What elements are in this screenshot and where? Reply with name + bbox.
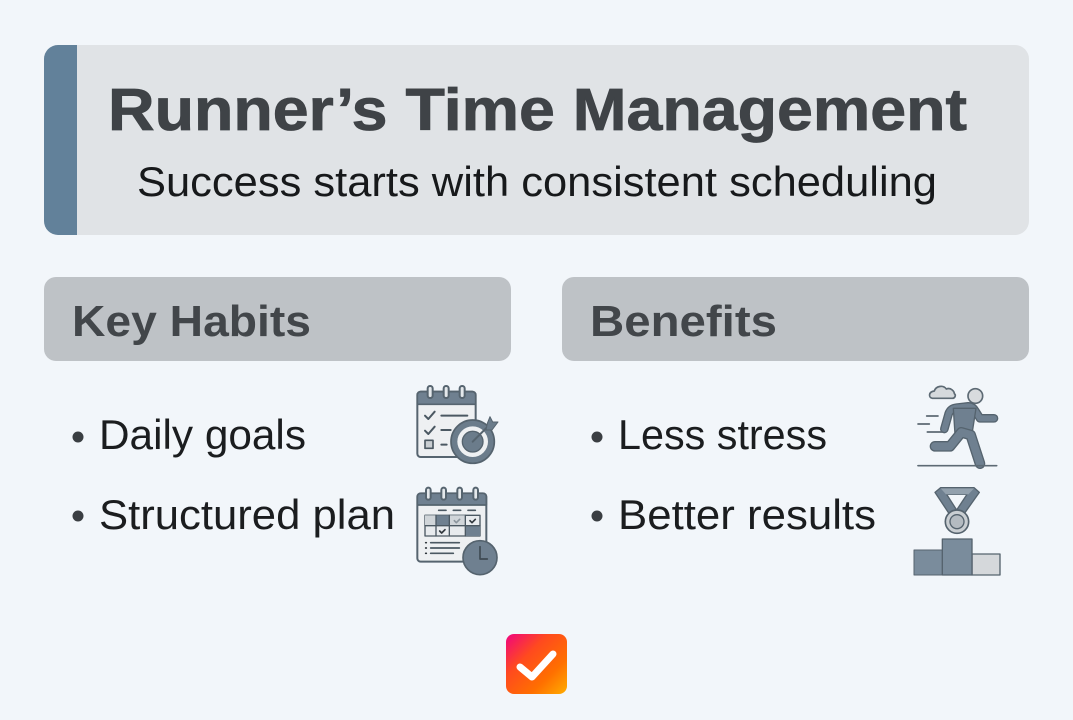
list item: daily goals: Daily goals (99, 411, 306, 458)
icon: medal on podium (914, 488, 1000, 575)
panel: title banner (44, 45, 1029, 235)
subtitle: Success starts with consistent scheduling (137, 158, 937, 205)
list item: structured plan: Structured plan (99, 491, 395, 538)
panel: benefits heading: Benefits (590, 297, 777, 346)
list item: better results: Better results (618, 491, 876, 538)
list item: less stress: Less stress (618, 411, 827, 458)
panel: key habits heading: Key Habits (72, 297, 311, 346)
icon: gradient check badge (506, 634, 567, 694)
panel: benefits heading (562, 277, 1029, 361)
icon: checklist calendar with target (417, 386, 498, 463)
icon: running figure (918, 386, 997, 466)
accent bar (44, 45, 77, 235)
panel: key habits heading (44, 277, 511, 361)
icon: schedule calendar with clock (417, 488, 497, 575)
title: Runner’s Time Management (108, 77, 967, 143)
